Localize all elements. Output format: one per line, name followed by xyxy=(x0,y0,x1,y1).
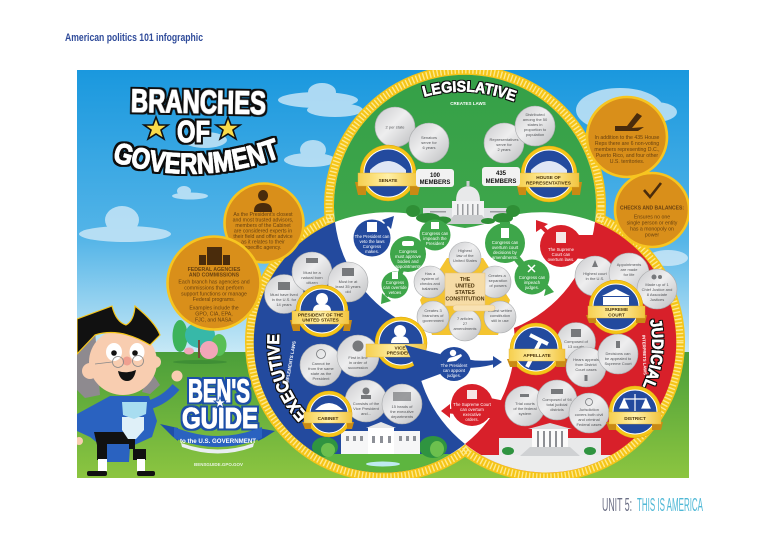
green: impeach president: Congress can xyxy=(422,231,449,236)
legislative coins xyxy=(375,106,555,163)
callout: checks and balances: single person or entity xyxy=(627,220,678,226)
ben: eyes xyxy=(106,343,144,361)
ben: waistcoat xyxy=(122,417,144,439)
judicial heading: JUDICIAL xyxy=(642,318,665,388)
coin: three branches: government xyxy=(422,318,444,323)
coin: not same state: state as the xyxy=(311,371,332,376)
coin: natural born xyxy=(292,252,332,292)
coin: 94 districts: districts xyxy=(550,407,564,412)
green: impeach judges xyxy=(514,260,550,294)
coin: jurisdiction: Federal cases xyxy=(576,422,602,427)
coin: jurisdiction: and criminal xyxy=(578,417,600,422)
ben: glasses and nose xyxy=(95,356,144,368)
green: approve bodies: appointments xyxy=(395,264,421,269)
illustration: white house xyxy=(341,422,420,454)
badge: vice president: VICE xyxy=(395,346,405,350)
coin: oldest written: Oldest written xyxy=(488,308,512,313)
badge: house of representatives xyxy=(516,146,582,202)
coin: oldest written xyxy=(484,301,516,333)
footer: unit label xyxy=(602,495,703,515)
coin: 94 districts xyxy=(537,380,577,420)
coin: highest court: in the U.S. xyxy=(586,276,604,281)
logo: ben's guide: BENSGUIDE.GPO.GOV xyxy=(194,462,244,468)
coin: decisions appealed: be appealed to xyxy=(605,356,632,361)
relationship: supreme court overturns orders: orders. xyxy=(465,417,479,422)
badge: district xyxy=(606,386,663,438)
coin: natural born: citizen xyxy=(306,280,318,285)
relationship: president can veto: makes. xyxy=(365,249,379,254)
green: impeach judges: impeach xyxy=(524,280,541,285)
callout: cabinet advisors: are considered experts in xyxy=(234,228,292,234)
relationship: supreme court overturns orders xyxy=(441,384,505,426)
relationship: supreme court overturns orders: executive xyxy=(463,412,482,417)
callout: non-voting members: In addition to the 435 House xyxy=(595,135,660,141)
coin: trial courts: Trial courts xyxy=(515,401,535,406)
coin: first in line: First in line xyxy=(348,355,368,360)
green: impeach president xyxy=(420,220,450,250)
relationship: congress green blobs xyxy=(381,220,554,304)
coin: 94 districts: total judicial xyxy=(547,402,568,407)
relationship: supreme court overturns laws: The Supreme xyxy=(548,247,575,252)
title: branches of government: OF xyxy=(177,114,210,149)
executive lawn and white house xyxy=(300,422,470,484)
green: overturn court decisions: overturn court xyxy=(492,245,519,250)
executive heading: EXECUTIVE xyxy=(266,334,306,424)
panel: legislative xyxy=(334,75,596,228)
coin: highest court: Highest court xyxy=(583,271,608,276)
callout: checks and balances: CHECKS AND BALANCES: xyxy=(620,206,684,212)
legislative heading: CREATES LAWS xyxy=(450,101,486,106)
callout: cabinet advisors: and most trusted advisors, xyxy=(233,218,293,224)
callout: checks and balances: power xyxy=(645,232,659,238)
coin: jurisdiction: Jurisdiction xyxy=(579,407,599,412)
character: ben franklin xyxy=(75,306,182,476)
coin: 15 heads xyxy=(382,384,422,424)
badge: cabinet xyxy=(302,391,354,437)
coin: 2 per state: 2 per state xyxy=(386,124,405,130)
coin: 14 years: in the U.S. for xyxy=(272,297,297,302)
icon: fountain xyxy=(366,462,400,466)
coin: appointments for life: are made xyxy=(621,267,638,272)
coin: distributed: Distributed xyxy=(525,112,545,117)
callout: checks and balances: has a monopoly on xyxy=(630,226,674,232)
gold rope border xyxy=(250,70,680,477)
badge: supreme court: COURT xyxy=(608,312,625,318)
coin: 15 heads: 15 heads of xyxy=(392,404,413,409)
coin: highest law: law of the xyxy=(456,253,474,258)
coin: 15 heads: the executive xyxy=(390,409,415,414)
coin: distributed: proportion to xyxy=(524,127,547,132)
ben: left hand xyxy=(75,437,83,445)
badge: district: DISTRICT xyxy=(624,416,646,421)
constitution centre xyxy=(414,242,516,341)
badge: president of the united states xyxy=(290,285,352,337)
logo: ben's guide xyxy=(160,373,275,468)
coin: vice president: Vice President xyxy=(353,406,380,411)
coin: not same state: from the same xyxy=(308,366,335,371)
coin: vice president: Consists of the xyxy=(353,401,380,406)
coin: three branches: Creates 3 xyxy=(424,308,442,313)
coin: trial courts: system xyxy=(519,411,532,416)
coin: hears appeals: Hears appeals xyxy=(573,357,599,362)
label: 435 members: MEMBERS xyxy=(486,179,516,185)
logo: ben's guide: GUIDE xyxy=(182,403,258,435)
badge: senate xyxy=(355,145,421,201)
judicial coins xyxy=(505,253,677,433)
coin: decisions appealed xyxy=(598,334,638,374)
badge: supreme court: SUPREME xyxy=(605,307,628,312)
legislative heading: LEGISLATIVE xyxy=(421,80,518,102)
coin: natural born: natural born xyxy=(301,275,323,280)
coin: decisions appealed: Supreme Court xyxy=(604,361,632,366)
green: impeach president: President xyxy=(426,241,445,246)
label: 435 members: 435 xyxy=(496,171,507,177)
badge: president of the united states: UNITED STATES xyxy=(302,318,339,322)
coin: 35 years old: least 35 years xyxy=(336,284,360,289)
coin: highest court xyxy=(575,256,615,296)
coin: highest law: United States xyxy=(453,258,477,263)
ben: hat xyxy=(77,306,160,354)
sky background xyxy=(77,70,689,353)
coin: 35 years old: Must be at xyxy=(339,279,358,284)
coin: 13 courts: Composed of xyxy=(564,339,589,344)
relationship: president can veto: The President can xyxy=(355,234,390,239)
coin: representatives: Representatives xyxy=(490,137,518,142)
coin: appointments for life: for life xyxy=(624,272,635,277)
coin: first in line xyxy=(337,335,379,377)
coin: distributed: among the 50 xyxy=(523,117,548,122)
decorative trees xyxy=(172,320,227,364)
relationship: president can veto: Congress xyxy=(363,244,381,249)
label: 435 members xyxy=(482,167,520,186)
scroll: the united states constitution: STATES xyxy=(455,290,475,296)
coin: highest law xyxy=(449,242,481,274)
ben: hand xyxy=(172,370,182,382)
coin: 13 courts xyxy=(556,322,596,362)
green: impeach judges: judges. xyxy=(524,285,539,290)
badge: cabinet: CABINET xyxy=(318,416,339,421)
coin: articles: amendments xyxy=(453,326,477,331)
coin: three branches: branches of xyxy=(423,313,444,318)
callout: federal agencies: Examples include the xyxy=(189,306,239,312)
coin: not same state xyxy=(300,344,342,386)
callout: federal agencies: Each branch has agencies and xyxy=(178,280,250,286)
coin: appointments for life xyxy=(609,253,649,293)
badge: appellate: APPELLATE xyxy=(523,353,551,358)
callout: cabinet advisors: As the President's closest xyxy=(233,212,293,218)
green: override vetoes: Congress xyxy=(386,280,404,285)
relationship: president can veto: veto the laws xyxy=(359,239,385,244)
coin: 35 years old: old xyxy=(345,289,351,294)
icon: left star xyxy=(144,117,168,139)
scroll: the united states constitution: UNITED xyxy=(455,284,475,290)
green: overturn court decisions: decisions by xyxy=(493,250,518,255)
coin: trial courts: of the federal xyxy=(513,406,537,411)
coin: 14 years: 14 years xyxy=(276,302,292,307)
judicial heading: INTERPRETS LAWS xyxy=(641,335,648,375)
illustration: capitol building xyxy=(406,181,520,224)
coin: distributed: population xyxy=(526,132,544,137)
coin: articles xyxy=(449,309,481,341)
coin: not same state: President xyxy=(313,376,330,381)
coin: representatives: 2 years xyxy=(497,147,511,152)
coin: senators: Senators xyxy=(421,135,437,140)
ben: right arm xyxy=(149,387,176,405)
green: approve bodies: bodies and xyxy=(397,259,419,264)
relationship: supreme court overturns orders: The Supreme Court xyxy=(453,402,492,407)
coin: senators: serve for xyxy=(421,140,437,145)
coin: highest law: Highest xyxy=(458,248,473,253)
callout: cabinet advisors: members of the Cabinet xyxy=(235,223,291,229)
coin: checks system: system of xyxy=(421,276,439,281)
relationship: supreme court overturns orders: can overturn xyxy=(460,407,485,412)
coin: separation of powers: separation xyxy=(489,278,507,283)
coin: chief justice xyxy=(637,269,677,309)
illustration: supreme court building xyxy=(480,423,640,485)
coin: separation of powers xyxy=(479,266,511,298)
coin: articles: 7 articles xyxy=(457,316,473,321)
icon: hand signing xyxy=(615,113,644,131)
coin: checks system xyxy=(414,266,446,298)
coin: hears appeals: from District xyxy=(575,362,598,367)
coin: 13 courts: 13 courts xyxy=(568,344,584,349)
scroll: the united states constitution: CONSTITUTION xyxy=(446,296,485,302)
title: branches of government xyxy=(112,86,278,176)
badge: senate: SENATE xyxy=(379,178,397,183)
callout: non-voting members: Reps there are 6 non-voting xyxy=(595,141,659,147)
icon: check mark xyxy=(644,183,661,197)
badge: president of the united states: PRESIDENT OF THE xyxy=(298,312,343,318)
coin: jurisdiction xyxy=(569,393,609,433)
relationship: supreme court overturns laws: overturn laws. xyxy=(548,257,574,262)
label: 100 members: MEMBERS xyxy=(420,180,450,186)
green: override vetoes xyxy=(382,272,408,298)
icon: logo star xyxy=(214,397,226,408)
ben: ears xyxy=(82,356,161,379)
relationship: president can veto xyxy=(354,216,394,256)
coin: checks system: checks and xyxy=(420,281,440,286)
coin: checks system: Has a xyxy=(425,271,436,276)
callout: federal agencies: AND COMMISSIONS xyxy=(189,272,240,278)
relationship: president can appoint judges xyxy=(405,345,502,381)
coin: senators xyxy=(409,123,449,163)
callout: cabinet advisors: as it relates to their xyxy=(241,240,285,246)
scroll: the united states constitution xyxy=(445,273,495,311)
panel: judicial xyxy=(465,222,676,473)
callout: federal agencies: Federal programs. xyxy=(193,297,235,303)
clouds xyxy=(79,83,688,266)
coin: vice president: and... xyxy=(361,411,371,416)
label: 100 members: 100 xyxy=(430,173,441,179)
coin: chief justice: Made up of 1 xyxy=(645,282,669,287)
page heading: American politics 101 infographic xyxy=(65,32,203,44)
coin: 2 per state xyxy=(375,107,415,147)
green: impeach judges: Congress can xyxy=(519,275,546,280)
coin: articles: 27 xyxy=(463,321,468,326)
ben: breeches xyxy=(94,432,146,460)
callout: federal agencies: FEDERAL AGENCIES xyxy=(188,267,241,273)
callout: non-voting members: members representing D.C., xyxy=(594,147,660,153)
label: 100 members xyxy=(416,169,454,187)
grass background xyxy=(77,352,689,478)
badge: vice president xyxy=(366,317,429,369)
coin: chief justice: 8 Associate xyxy=(647,292,668,297)
coin: representatives: serve for xyxy=(496,142,512,147)
green: overturn court decisions xyxy=(485,223,525,263)
ben: tail of coat xyxy=(107,444,129,462)
callout: cabinet advisors: specific agency. xyxy=(245,245,281,251)
relationship: supreme court overturns laws xyxy=(536,220,610,267)
green: approve bodies: must approve xyxy=(395,254,422,259)
callout: non-voting members xyxy=(587,97,667,177)
ben: socks and shoes xyxy=(87,459,155,476)
coin: hears appeals: Court cases xyxy=(575,367,597,372)
coin: 14 years: Must have lived xyxy=(270,292,298,297)
coin: checks system: balances xyxy=(422,286,438,291)
icon: right star xyxy=(216,117,240,139)
coin: 14 years xyxy=(264,274,304,314)
coin: separation of powers: of powers xyxy=(489,283,507,288)
panel: executive xyxy=(254,222,465,473)
relationship: president can appoint judges: judges. xyxy=(446,373,461,378)
coin: three branches xyxy=(417,301,449,333)
callout: cabinet advisors: their field and offer advice xyxy=(233,234,293,240)
coin: 35 years old xyxy=(328,262,368,302)
footer: unit label: UNIT 5: xyxy=(602,495,632,515)
executive heading: IMPLEMENTS LAWS xyxy=(284,341,297,385)
badge: house of representatives: HOUSE OF xyxy=(536,175,561,180)
badge: supreme court xyxy=(586,280,647,334)
coin: decisions appealed: Decisions can xyxy=(606,351,630,356)
coin: senators: 6 years xyxy=(422,145,436,150)
callout: cabinet advisors xyxy=(224,184,304,262)
infographic poster xyxy=(77,70,689,478)
green: approve bodies xyxy=(390,236,426,272)
relationship: president can appoint judges: The President xyxy=(441,363,468,368)
green: approve bodies: Congress xyxy=(399,249,417,254)
coin: jurisdiction: covers both civil xyxy=(575,412,603,417)
coin: chief justice: Chief Justice and xyxy=(642,287,672,292)
executive coins xyxy=(264,252,422,424)
logo: ben's guide: BEN'S xyxy=(188,373,250,409)
coin: first in line: in order of xyxy=(349,360,368,365)
callout: federal agencies: support functions or manage xyxy=(181,292,247,298)
ben: mouth xyxy=(118,370,136,381)
icon: buildings xyxy=(199,247,230,265)
venn diagram: three branches xyxy=(250,70,680,477)
icon: person xyxy=(254,190,272,212)
ben: jacket xyxy=(77,396,157,462)
badge: appellate xyxy=(507,323,567,375)
coin: 15 heads: departments xyxy=(391,414,413,419)
logo tagline band xyxy=(181,443,254,454)
callout: checks and balances xyxy=(615,173,689,247)
coin: vice president xyxy=(345,380,387,422)
coin: oldest written: constitution xyxy=(490,313,510,318)
coin: oldest written: still in use xyxy=(491,318,510,323)
callout: checks and balances: Ensures no one xyxy=(634,214,670,220)
callout: non-voting members: U.S. territories. xyxy=(610,159,644,165)
green: impeach president: impeach the xyxy=(423,236,447,241)
callout: non-voting members: Puerto Rico, and four other xyxy=(596,153,658,159)
ben: face xyxy=(89,329,157,395)
white overlap area xyxy=(312,75,618,468)
coin: distributed: states in xyxy=(528,122,542,127)
ben: hair xyxy=(77,330,160,398)
green: override vetoes: can override xyxy=(383,285,407,290)
green: overturn court decisions: amendments. xyxy=(492,255,518,260)
coin: first in line: succession xyxy=(348,365,368,370)
coin: hears appeals xyxy=(566,347,606,387)
title: branches of government: BRANCHES xyxy=(131,83,266,121)
coin: appointments for life: Appointments xyxy=(617,262,641,267)
ben: cravat xyxy=(122,402,147,419)
coin: natural born: Must be a xyxy=(303,270,322,275)
coin: distributed xyxy=(515,106,555,146)
callout: federal agencies: commissions that perform xyxy=(184,286,244,292)
green: overturn court decisions: Congress can xyxy=(492,240,519,245)
green: override vetoes: vetoes xyxy=(389,290,401,295)
relationship: supreme court overturns laws: Court can xyxy=(552,252,571,257)
badge: house of representatives: REPRESENTATIVES xyxy=(526,180,571,186)
scroll: the united states constitution: THE xyxy=(460,277,471,283)
coin: 94 districts: Composed of 94 xyxy=(542,397,572,402)
callout: federal agencies xyxy=(168,236,260,330)
coin: representatives xyxy=(484,123,524,163)
callout: federal agencies: FJC, and NASA. xyxy=(195,318,233,324)
coin: chief justice: Justices xyxy=(650,297,664,302)
coin: not same state: Cannot be xyxy=(312,361,331,366)
coin: trial courts xyxy=(505,386,545,426)
relationship: president can appoint judges: can appoint xyxy=(443,368,466,373)
coin: separation of powers: Creates a xyxy=(488,273,506,278)
title: branches of government: GOVERNMENT xyxy=(112,136,278,176)
logo ribbon: to the U.S. GOVERNMENT xyxy=(180,438,256,445)
callout: federal agencies: GPO, CIA, EPA, xyxy=(195,312,233,318)
badge: vice president: PRESIDENT xyxy=(387,350,414,356)
